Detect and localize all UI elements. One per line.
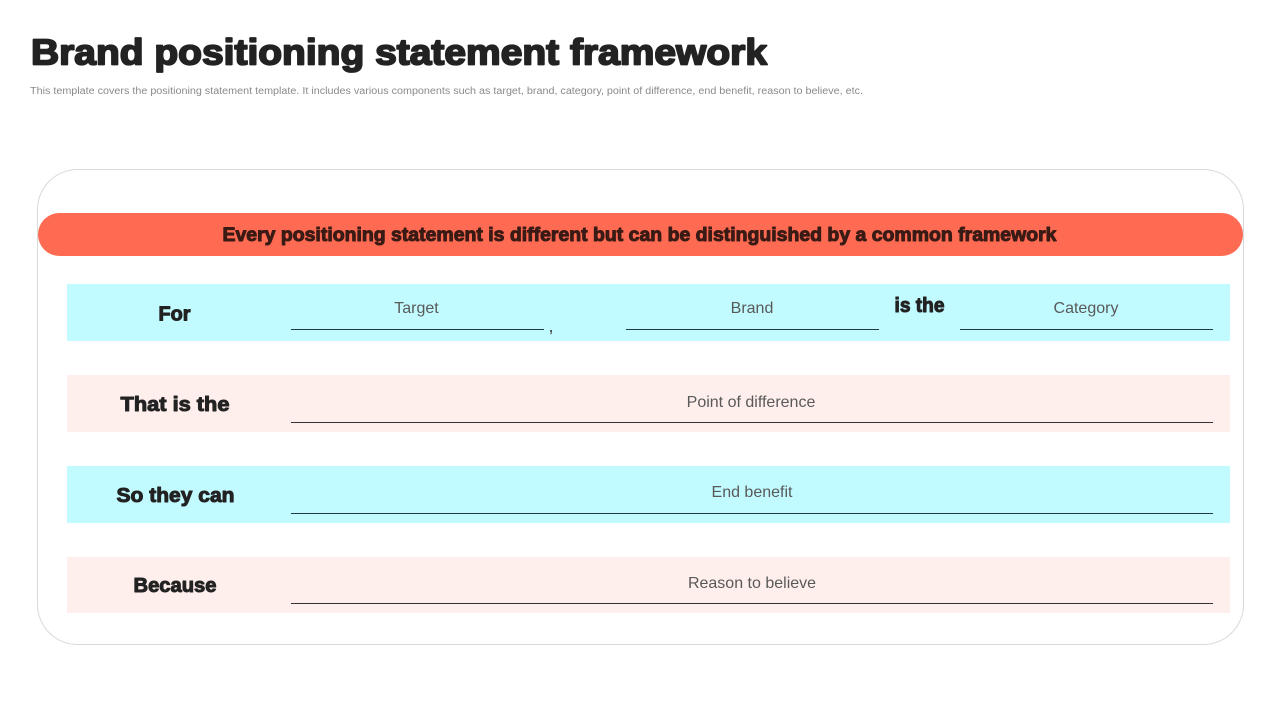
row: for target brand category (67, 284, 1230, 341)
row: for target brand category: , (548, 316, 554, 336)
row: end benefit (67, 466, 1230, 523)
title: Brand positioning statement framework (31, 32, 768, 72)
panel outline (38, 170, 1244, 644)
field: target: Target (394, 300, 439, 317)
field: brand: Brand (731, 300, 773, 317)
row: point of difference (67, 375, 1230, 432)
banner text: Every positioning statement is different but can be distinguished by a common framework (222, 225, 1057, 246)
label: so they can: So they can (116, 485, 234, 507)
field: end benefit: End benefit (712, 484, 793, 501)
banner (38, 213, 1243, 256)
subtitle text: This template covers the positioning statement template. It includes various components such as target, brand, category, point of difference, end benefit, reason to believe, etc. (30, 86, 863, 97)
label: that is the: That is the (120, 394, 230, 416)
panel: framework (38, 170, 1244, 644)
field: reason to believe: Reason to believe (688, 575, 816, 592)
field: point of difference: Point of difference (687, 394, 815, 411)
label: because: Because (134, 575, 216, 597)
row: reason to believe (67, 557, 1230, 613)
label: is the: is the (894, 295, 944, 317)
field: category: Category (1054, 300, 1118, 317)
label: for: For (158, 304, 191, 326)
